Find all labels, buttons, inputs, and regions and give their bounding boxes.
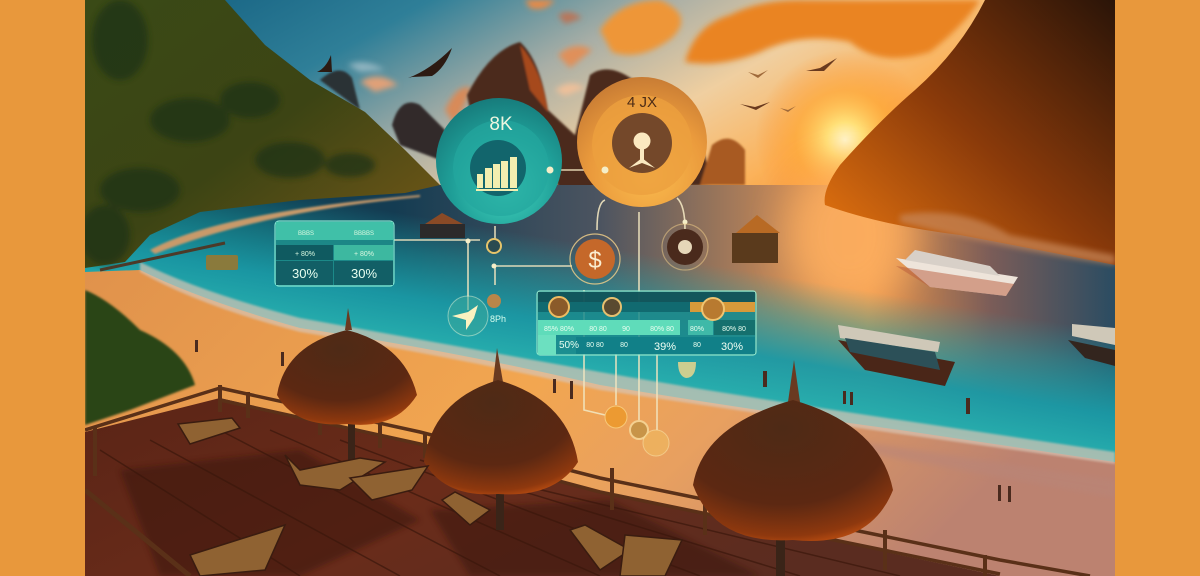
beach sand (85, 270, 1115, 576)
teal metric circle (436, 98, 562, 224)
sun reflection (785, 160, 915, 310)
sun glow (762, 56, 910, 184)
icon: dollar badge (570, 234, 620, 284)
icon: eye badge (662, 224, 708, 270)
connector nodes (466, 166, 688, 268)
icon: plane badge (448, 296, 506, 336)
panel: left data table: 30% (351, 266, 377, 281)
left bush (85, 290, 195, 425)
right orange side bar (1115, 0, 1200, 576)
connector lines (394, 170, 685, 430)
deck planks (100, 425, 900, 576)
panel: left data table: BBBBS (354, 231, 374, 237)
left green hill (85, 0, 440, 268)
clouds (348, 0, 980, 125)
beach figures (195, 340, 1011, 502)
umbrella right (693, 360, 893, 576)
panel: lower data table: 80 (693, 342, 701, 349)
plane label: 8Ph (490, 314, 506, 324)
cliff base rocks (900, 212, 1115, 265)
umbrella left (277, 308, 417, 460)
table values: 30% (292, 266, 318, 281)
white yacht (896, 250, 1018, 296)
table row labels: + 80% (295, 251, 315, 258)
badge icons on lower table (549, 297, 724, 320)
panel: lower data table: 80 80 (589, 326, 607, 333)
table big values: 50% (559, 340, 579, 351)
stilt hut right (732, 215, 780, 263)
value 4 JX: 4 JX (627, 94, 657, 111)
panel: left data table: + 80% (354, 251, 374, 258)
panel: lower data table: 80% 80 (722, 326, 746, 333)
icon: figure (629, 132, 655, 168)
panel: lower data table (537, 291, 756, 355)
right cliff (825, 0, 1115, 265)
panel: lower data table: 80% 80 (650, 326, 674, 333)
tour boat (838, 325, 955, 386)
sea (122, 185, 1115, 424)
deck shadows (120, 450, 760, 576)
deck (85, 398, 1000, 576)
icon: bar chart (476, 157, 518, 191)
foam line (140, 262, 1115, 464)
shallow turquoise water (85, 200, 1115, 480)
panel: lower data table: 39% (654, 341, 676, 353)
value 8K: 8K (489, 114, 513, 135)
birds (317, 48, 837, 112)
umbrella centre (424, 348, 578, 530)
panel: lower data table: 90 (622, 326, 630, 333)
panel: lower data table: 80 80 (586, 342, 604, 349)
panel: lower data table: 80 (620, 342, 628, 349)
left orange side bar (0, 0, 85, 576)
sun loungers (178, 418, 682, 576)
sky (225, 0, 985, 185)
right-edge boat (1068, 324, 1115, 366)
table small labels: 85% 80% (544, 326, 574, 333)
panel: lower data table: 30% (721, 341, 743, 353)
panel: lower data table: 80% (690, 326, 704, 333)
table headers: BBBS (298, 231, 314, 237)
distant karst rocks (320, 42, 745, 192)
left pier (100, 243, 225, 270)
small moored boat (206, 255, 238, 270)
hill foliage texture (80, 0, 375, 265)
amber metric circle (577, 77, 707, 207)
right wet sand (871, 444, 937, 460)
icon: small node badge (487, 239, 501, 308)
icon: dollar badge: $ (588, 247, 602, 274)
panel: left data table (275, 221, 394, 286)
deck railing (85, 385, 1090, 576)
sandy spit under hill (150, 195, 420, 254)
icon: bottom badges (605, 362, 696, 456)
stilt hut left (420, 213, 465, 238)
